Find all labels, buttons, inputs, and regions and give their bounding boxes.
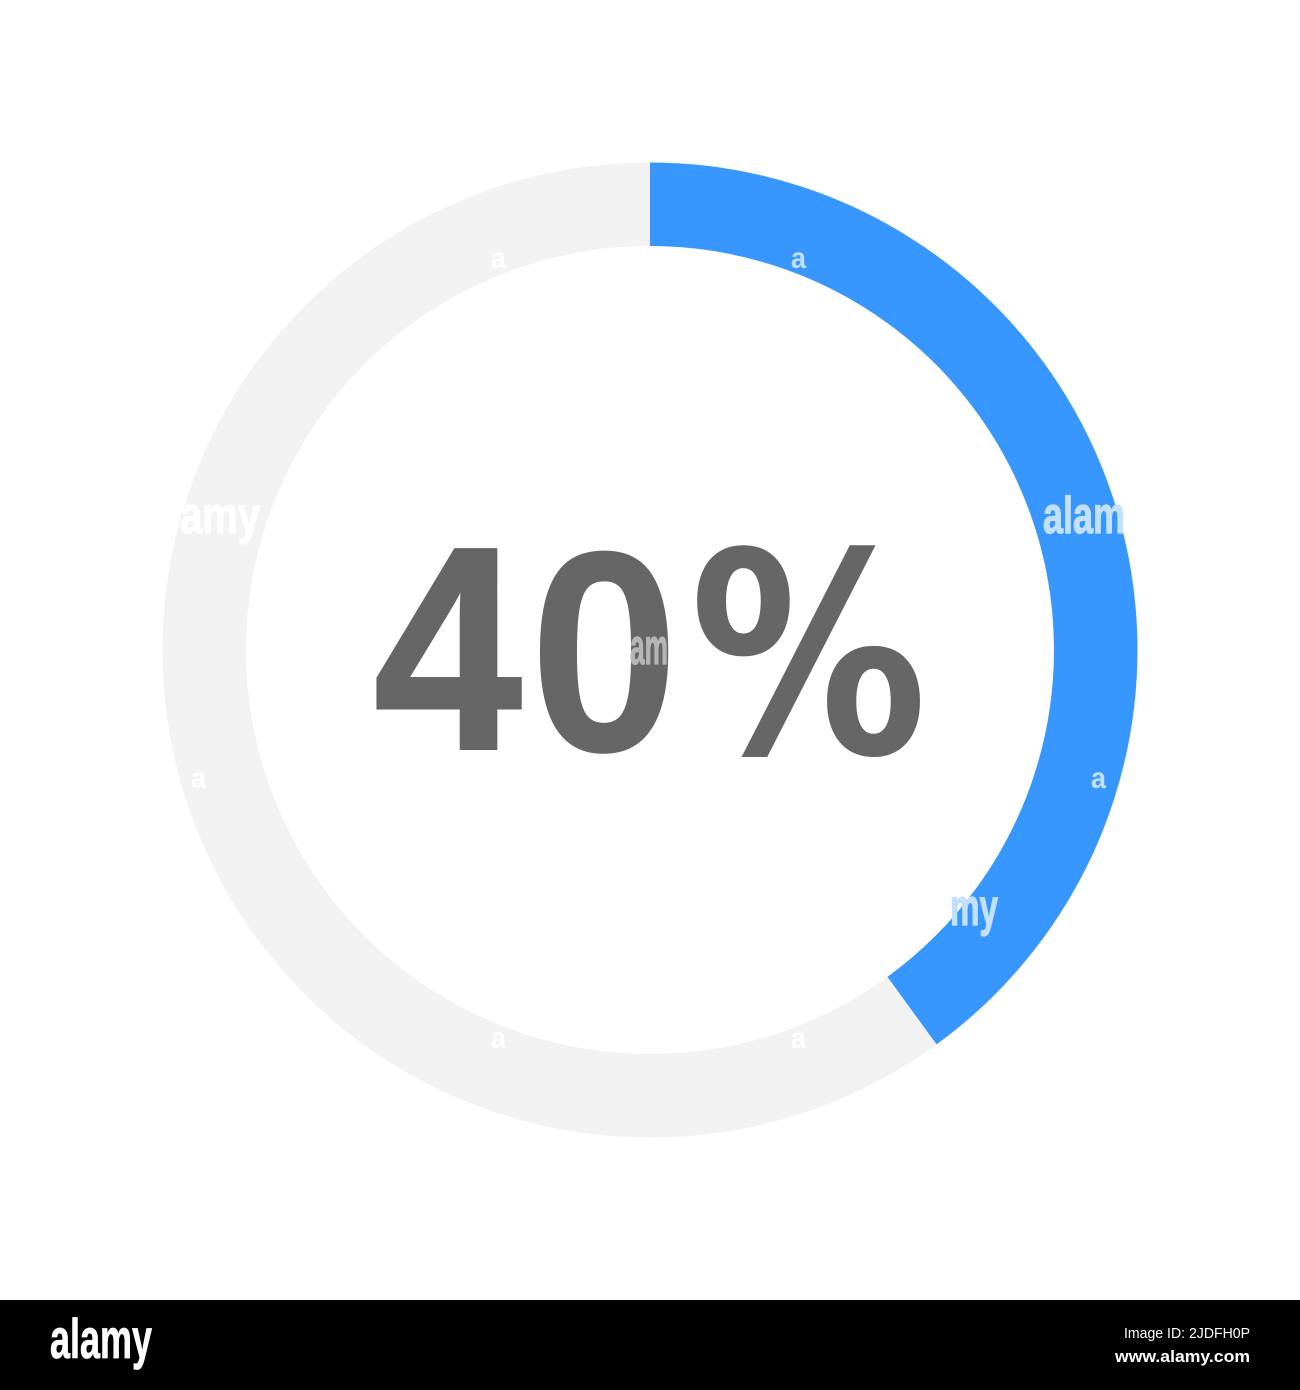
watermark fragments: a	[491, 242, 506, 275]
watermark fragments: amy	[180, 487, 260, 545]
progress ring track	[204, 204, 1096, 1096]
image id: Image ID: 2JDFH0P	[1124, 1325, 1250, 1342]
watermark fragments	[180, 242, 1125, 1055]
progress ring 40% arc	[650, 204, 1096, 1011]
watermark fragments: a	[791, 1022, 806, 1055]
watermark fragments: a	[791, 242, 806, 275]
percentage label: 0	[529, 491, 679, 812]
percentage label	[374, 488, 928, 820]
watermark fragments: a	[191, 762, 206, 795]
watermark fragments: a	[1091, 762, 1106, 795]
website: www.alamy.com	[1114, 1347, 1250, 1366]
percentage label: %	[690, 494, 928, 820]
percentage label: 4	[374, 488, 523, 810]
footer logo: alamy	[50, 1307, 152, 1370]
watermark fragments: alam	[1043, 487, 1125, 545]
watermark fragments: a	[491, 1022, 506, 1055]
footer bar	[0, 1300, 1300, 1390]
watermark over label: am	[630, 619, 668, 675]
watermark fragments: my	[950, 879, 998, 937]
